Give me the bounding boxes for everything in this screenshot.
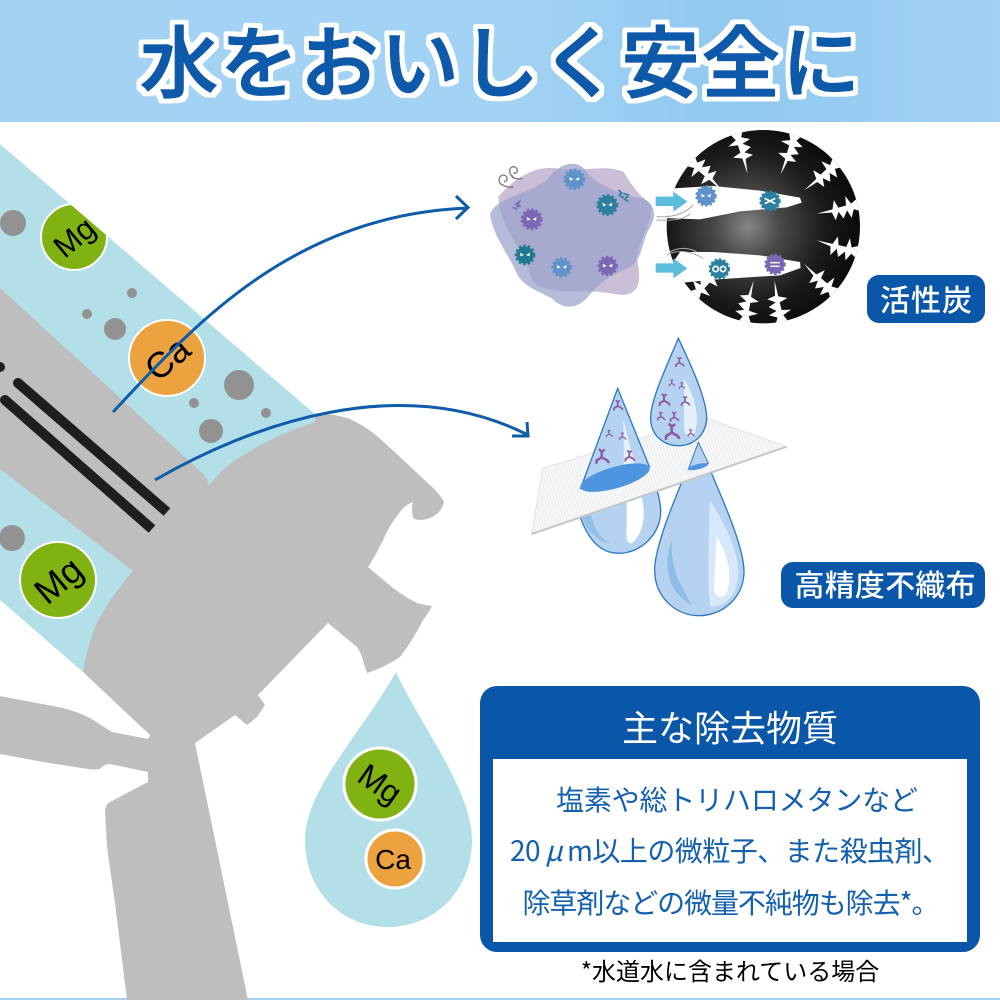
- bacteria in cloud: [516, 170, 617, 276]
- panel heading: 主な除去物質: [622, 700, 838, 752]
- arrow to activated carbon: [113, 196, 468, 412]
- contaminated cloud: [490, 164, 654, 307]
- motion lines: [657, 205, 703, 258]
- Mg ion in drop: [344, 748, 416, 820]
- label: high-precision non-woven fabric: 高精度不織布: [794, 561, 976, 605]
- panel: removed substances: [480, 686, 980, 952]
- trapped bacteria: [697, 187, 784, 278]
- Mg ion in drop: Mg: [351, 757, 409, 811]
- filter housing silhouette: [0, 288, 444, 1000]
- lower drop left: [573, 470, 661, 553]
- arrow to non-woven fabric: [155, 406, 528, 480]
- title banner: [0, 0, 1000, 122]
- lower drop right: [655, 442, 744, 616]
- upper drop: [651, 338, 707, 446]
- label: activated carbon: 活性炭: [880, 276, 972, 320]
- fabric filter illustration: [532, 338, 787, 616]
- title: 水をおいしく安全に: [140, 2, 860, 114]
- bottom edge line: [0, 998, 1000, 1000]
- mineral particles: [0, 210, 271, 551]
- activated carbon illustration: [490, 127, 864, 328]
- spark marks purple: [513, 202, 521, 209]
- Ca ion upper: Ca: [137, 327, 199, 389]
- footnote: *水道水に含まれている場合: [581, 952, 879, 987]
- carbon particle: [660, 127, 864, 328]
- Ca ion in drop: Ca: [375, 844, 411, 875]
- purified water drop: [305, 672, 472, 927]
- filter cutaway illustration: [0, 144, 444, 1000]
- Ca ion upper: [129, 320, 205, 396]
- filter slots: [0, 362, 167, 529]
- odor curls: [499, 167, 523, 187]
- panel body: 20μm以上の微粒子、また殺虫剤、: [510, 830, 950, 870]
- cone above fabric right: [687, 442, 709, 472]
- water band: [0, 144, 316, 672]
- spark marks: [618, 190, 628, 202]
- inflow arrows: [656, 192, 687, 278]
- panel body: [493, 759, 967, 942]
- Mg ion upper: Mg: [47, 210, 102, 265]
- panel body: 塩素や総トリハロメタンなど: [556, 779, 918, 819]
- cone above fabric left: [577, 388, 653, 498]
- Mg ion lower: Mg: [26, 549, 91, 612]
- Mg ion upper: [41, 204, 107, 270]
- panel body: 除草剤などの微量不純物も除去*。: [522, 882, 940, 922]
- Ca ion in drop: [366, 830, 424, 888]
- non-woven fabric sheet: [532, 418, 787, 534]
